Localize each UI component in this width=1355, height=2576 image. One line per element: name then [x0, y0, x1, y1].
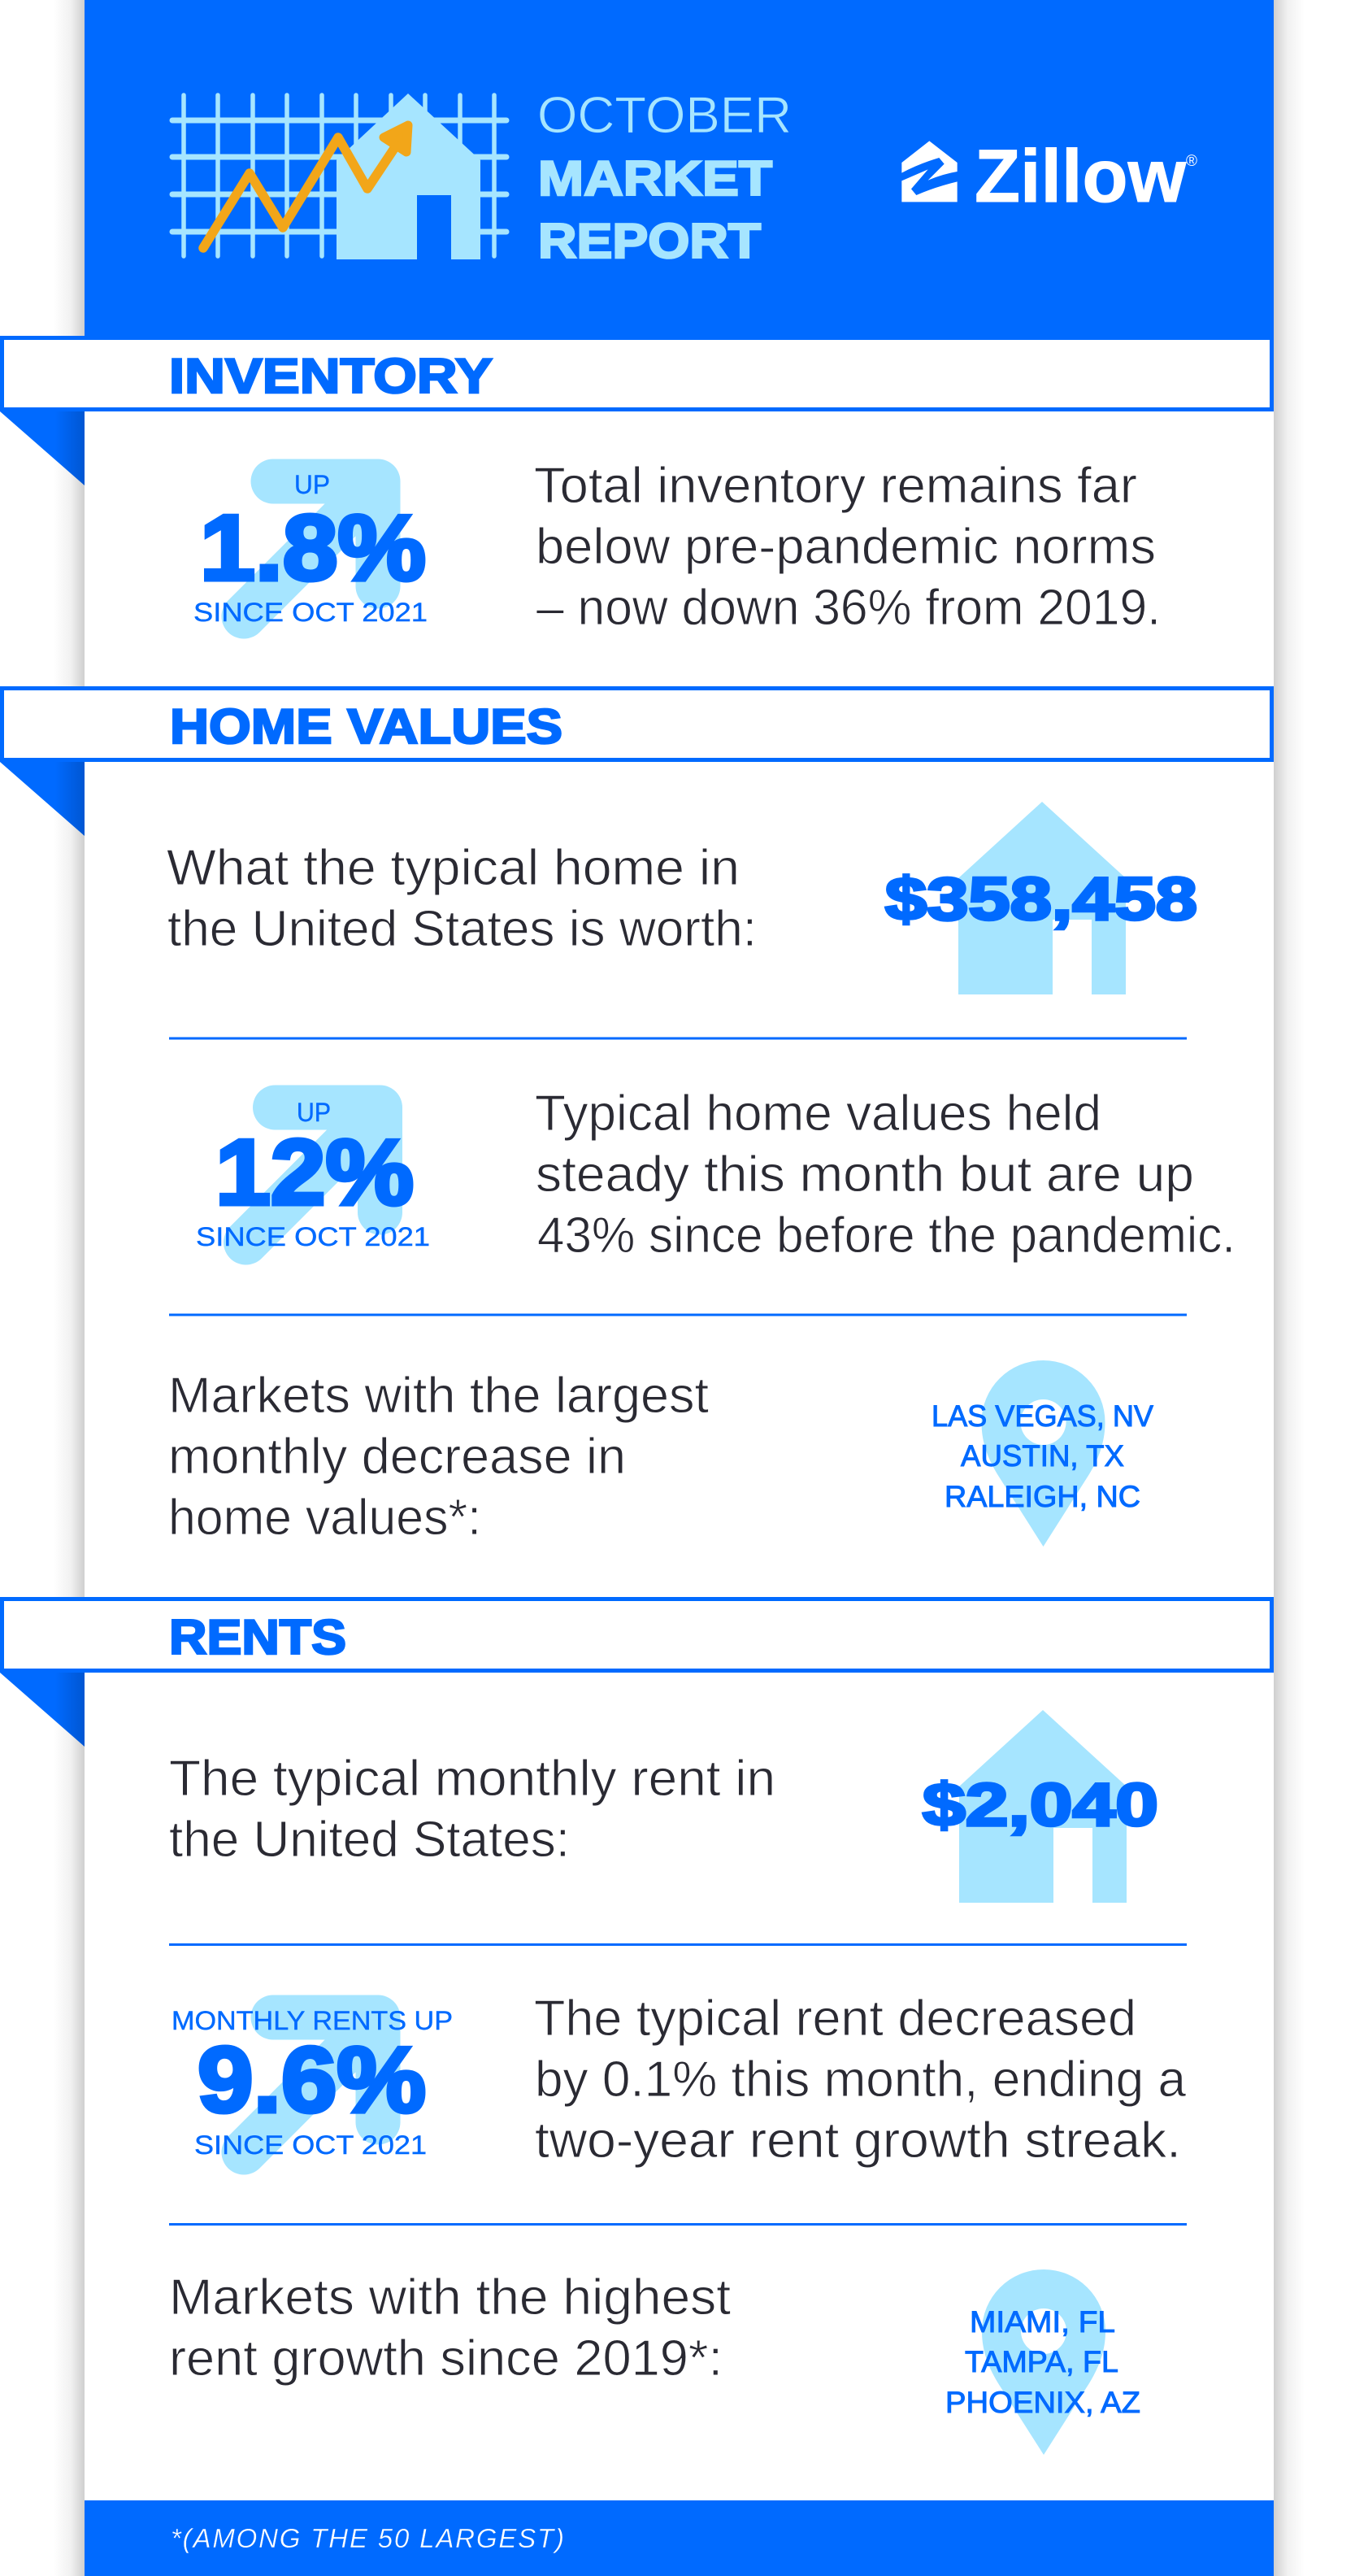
- text: markets with largest decrease: home values*:: [168, 1490, 481, 1546]
- text: typical home worth: the United States is worth:: [167, 901, 757, 957]
- stat badge: monthly rents up 9.6%: MONTHLY RENTS UP: [172, 2006, 453, 2035]
- map pin: markets with decreases: [932, 1360, 1153, 1547]
- stat badge: inventory up 1.8%: UP: [294, 470, 330, 499]
- stat badge: inventory up 1.8%: [193, 470, 428, 627]
- header banner: [85, 0, 1274, 342]
- text: rents summary: by 0.1% this month, ending a: [535, 2052, 1187, 2108]
- section bar: home values: HOME VALUES: [170, 699, 562, 754]
- text: typical monthly rent: the United States:: [169, 1812, 570, 1868]
- footer banner with note: *(AMONG THE 50 LARGEST): [171, 2523, 564, 2553]
- text: typical home worth: [167, 840, 757, 957]
- map pin: markets with rent growth: MIAMI, FL: [970, 2305, 1115, 2339]
- title: October Market Report: MARKET: [538, 151, 772, 206]
- map pin: markets with decreases: RALEIGH, NC: [945, 1480, 1140, 1513]
- text: markets with largest decrease: monthly decrease in: [168, 1429, 626, 1485]
- text: inventory summary: Total inventory remains far: [534, 458, 1137, 514]
- text: markets with highest rent growth: rent growth since 2019*:: [169, 2330, 723, 2387]
- icon: grid chart with house and rising arrow: [172, 94, 506, 259]
- text: markets with highest rent growth: Markets with the highest: [169, 2269, 731, 2326]
- section bar: inventory: [0, 338, 1271, 485]
- stat badge: monthly rents up 9.6%: SINCE OCT 2021: [194, 2130, 427, 2160]
- section bar: home values: [0, 688, 1271, 836]
- text: rents summary: [534, 1991, 1187, 2169]
- stat badge: monthly rents up 9.6%: 9.6%: [198, 2029, 426, 2132]
- text: home values summary: 43% since before the pandemic.: [537, 1208, 1236, 1264]
- logo: Zillow: Zillow: [975, 135, 1186, 218]
- section bar: inventory: INVENTORY: [169, 349, 493, 403]
- stat: typical rent on house icon: [923, 1710, 1158, 1903]
- map pin: markets with decreases: AUSTIN, TX: [961, 1439, 1124, 1473]
- map pin: markets with rent growth: PHOENIX, AZ: [945, 2386, 1140, 2419]
- stat badge: home values up 12%: SINCE OCT 2021: [196, 1222, 430, 1251]
- text: inventory summary: – now down 36% from 2019.: [536, 580, 1161, 636]
- map pin: markets with rent growth: [945, 2269, 1140, 2455]
- text: typical monthly rent: [169, 1751, 775, 1868]
- stat: typical home value on house icon: [885, 802, 1197, 994]
- text: rents summary: The typical rent decreased: [534, 1991, 1136, 2047]
- stat badge: home values up 12%: UP: [297, 1098, 331, 1127]
- footer banner with note: [85, 2500, 1274, 2576]
- text: markets with largest decrease: Markets with the largest: [168, 1368, 709, 1424]
- text: typical home worth: What the typical home in: [167, 840, 740, 896]
- title: October Market Report: [537, 87, 792, 268]
- stat badge: inventory up 1.8%: SINCE OCT 2021: [193, 598, 428, 627]
- stat: typical home value on house icon: $358,458: [885, 865, 1197, 933]
- text: markets with highest rent growth: [169, 2269, 731, 2387]
- logo: Zillow: ®: [1186, 153, 1197, 170]
- section bar: rents: RENTS: [169, 1610, 346, 1664]
- stat badge: home values up 12%: [196, 1098, 430, 1251]
- text: rents summary: two-year rent growth streak.: [535, 2113, 1181, 2169]
- stat badge: home values up 12%: 12%: [215, 1121, 414, 1225]
- text: home values summary: steady this month but are up: [536, 1147, 1194, 1203]
- map pin: markets with decreases: LAS VEGAS, NV: [932, 1399, 1153, 1433]
- section bar: rents: [0, 1599, 1271, 1747]
- text: inventory summary: below pre-pandemic norms: [536, 519, 1156, 575]
- stat badge: inventory up 1.8%: 1.8%: [200, 497, 426, 600]
- text: typical monthly rent: The typical monthly rent in: [169, 1751, 775, 1807]
- text: inventory summary: [534, 458, 1161, 636]
- text: markets with largest decrease: [168, 1368, 709, 1546]
- text: home values summary: Typical home values held: [535, 1086, 1101, 1142]
- title: October Market Report: OCTOBER: [537, 87, 792, 144]
- text: home values summary: [535, 1086, 1236, 1264]
- map pin: markets with rent growth: TAMPA, FL: [965, 2345, 1118, 2378]
- title: October Market Report: REPORT: [538, 214, 761, 268]
- stat badge: monthly rents up 9.6%: [172, 2006, 453, 2160]
- stat: typical rent on house icon: $2,040: [923, 1771, 1158, 1838]
